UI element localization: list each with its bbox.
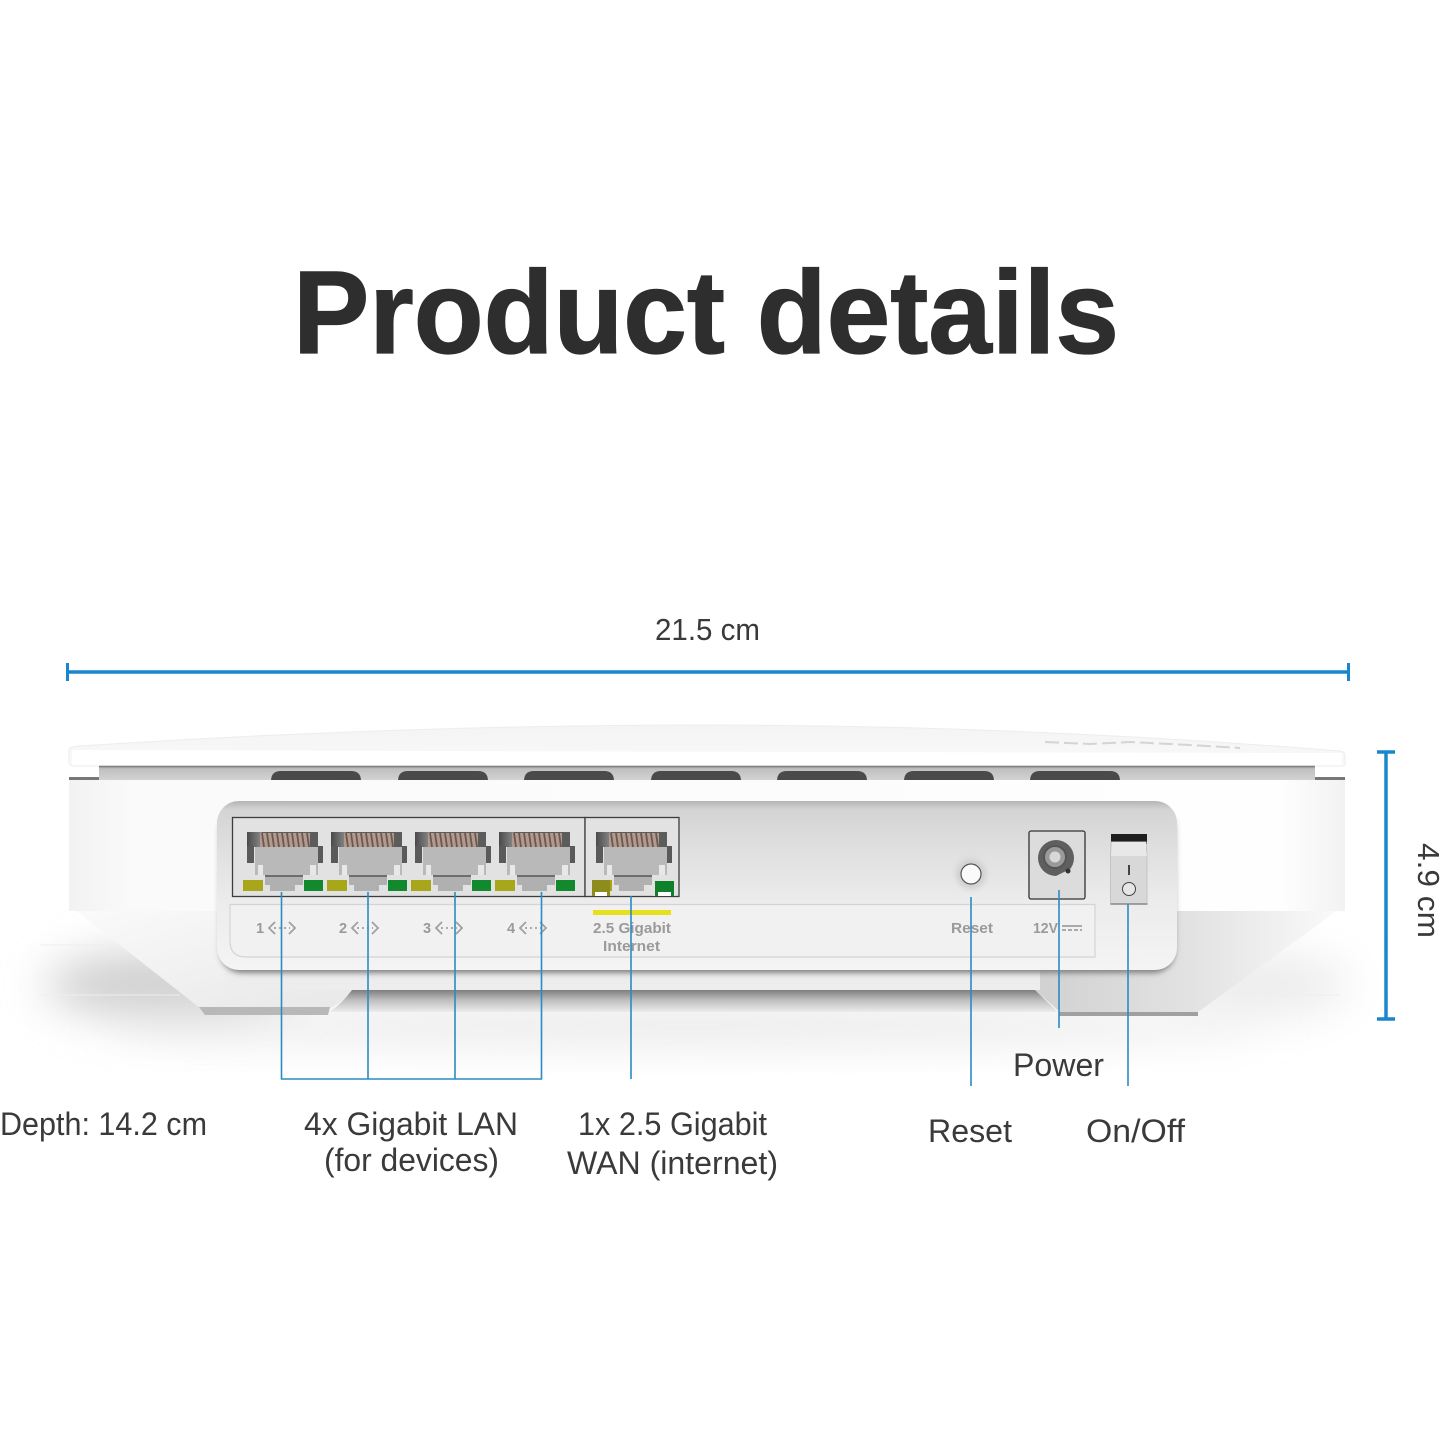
label: on/off: On/Off	[1086, 1113, 1185, 1149]
port labels: 2	[339, 921, 347, 937]
WAN port	[592, 832, 675, 896]
port labels: 1	[256, 921, 264, 937]
reset button	[956, 859, 986, 889]
right foot strip	[1059, 1012, 1198, 1016]
port labels: 3	[423, 921, 431, 937]
left foot strip	[199, 1007, 330, 1015]
power socket	[1029, 831, 1085, 899]
yellow WAN marker	[593, 910, 671, 915]
rear panel shadow	[220, 808, 1175, 973]
port labels: 4	[507, 921, 515, 937]
height dimension: 4.9 cm: 4.9 cm	[1411, 843, 1445, 938]
port surround: WAN	[585, 818, 679, 896]
height dimension: 4.9 cm	[1377, 751, 1445, 1019]
label: WAN port	[567, 1106, 778, 1181]
main body	[69, 780, 1345, 911]
LAN port 4	[495, 832, 575, 891]
port labels: 2.5 Gigabit	[593, 921, 671, 937]
label: depth: Depth: 14.2 cm	[0, 1106, 207, 1142]
label strip	[230, 904, 1095, 957]
callout lines	[281, 890, 1128, 1086]
width dimension: 21.5 cm	[68, 612, 1348, 681]
router device	[40, 725, 1350, 1041]
recess below lid	[99, 765, 1315, 781]
label: WAN port: 1x 2.5 Gigabit	[578, 1106, 767, 1142]
faint lid logo	[1045, 742, 1240, 748]
LAN port 3	[411, 832, 491, 891]
floor shadow	[40, 945, 1350, 1041]
port labels: Reset	[951, 921, 993, 937]
label: LAN ports: 4x Gigabit LAN	[304, 1106, 518, 1142]
label: LAN ports: (for devices)	[324, 1142, 499, 1178]
LAN port 2	[327, 832, 407, 891]
width dimension: 21.5 cm: 21.5 cm	[655, 612, 760, 647]
on/off switch	[1110, 834, 1148, 904]
rear panel	[217, 801, 1177, 970]
label: LAN ports	[304, 1106, 518, 1178]
LAN port 1	[243, 832, 323, 891]
under-body shadow	[330, 990, 1058, 1012]
top lid	[69, 725, 1345, 766]
vent slots	[271, 771, 1120, 781]
label: power: Power	[1013, 1047, 1104, 1083]
title: Product details	[293, 247, 1119, 379]
port labels	[256, 921, 1058, 955]
left base wedge	[69, 905, 420, 1008]
bidirectional arrows	[269, 922, 1082, 934]
right base wedge	[1000, 905, 1345, 1012]
label: WAN port: WAN (internet)	[567, 1145, 778, 1181]
port labels: Internet	[603, 939, 660, 955]
label: reset: Reset	[928, 1113, 1012, 1149]
port labels: 12V	[1033, 921, 1058, 937]
port surround: LAN	[232, 818, 585, 896]
